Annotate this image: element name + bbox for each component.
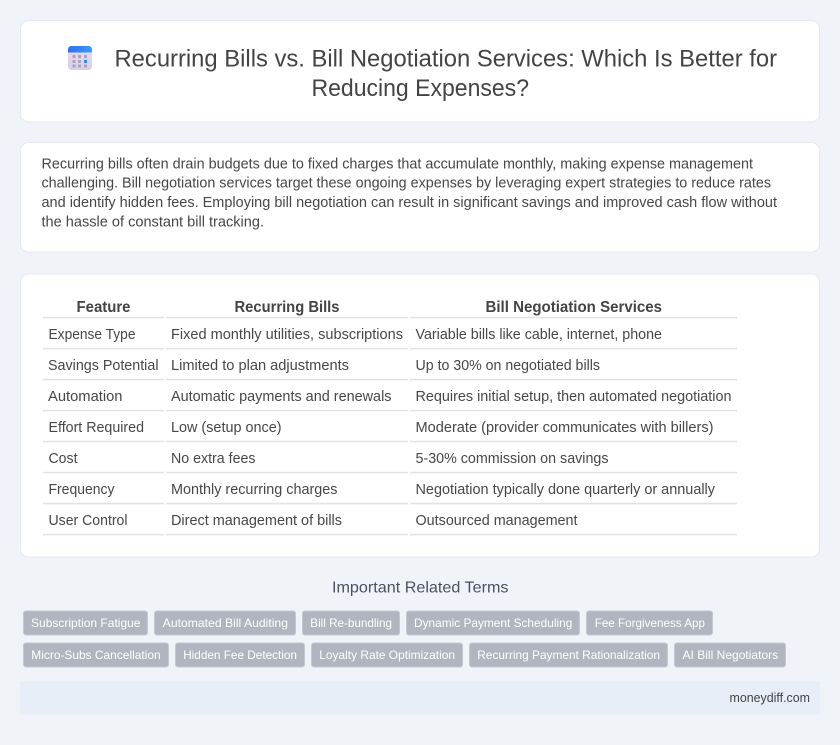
tag: fee forgiveness app (586, 611, 712, 635)
row: automation: Automatic payments and renewals (171, 389, 392, 405)
table header row: Feature (76, 299, 131, 316)
row: frequency: Frequency (48, 482, 115, 498)
related terms heading: Important Related Terms (332, 580, 508, 596)
tag: automated bill auditing: Automated Bill Auditing (163, 616, 288, 630)
tag: recurring payment rationalization: Recurring Payment Rationalization (477, 648, 660, 662)
header panel (20, 20, 820, 122)
icon: calendar (68, 46, 92, 70)
intro text block: Recurring bills often drain budgets due to fixed charges that accumulate monthly, making expense management (42, 156, 753, 172)
tag: hidden fee detection: Hidden Fee Detection (183, 648, 297, 662)
title: Recurring Bills vs. Bill Negotiation Services: Which Is Better for (114, 46, 777, 73)
tag: automated bill auditing (154, 611, 296, 635)
comparison table panel (20, 274, 820, 557)
row: effort required: Low (setup once) (171, 420, 282, 436)
title: Reducing Expenses? (312, 75, 529, 102)
row: savings potential: Limited to plan adjustments (171, 358, 349, 374)
footer bar (20, 681, 820, 714)
row: effort required: Effort Required (48, 420, 144, 436)
tag: bill re-bundling: Bill Re-bundling (310, 616, 392, 630)
tag: dynamic payment scheduling: Dynamic Payment Scheduling (414, 616, 572, 630)
intro text block: challenging. Bill negotiation services target these ongoing expenses by leveraging expert strategies to reduce rates (42, 176, 771, 192)
tag: ai bill negotiators (674, 643, 786, 667)
row: frequency: Negotiation typically done quarterly or annually (416, 482, 716, 498)
footer source text: moneydiff.com (730, 691, 810, 705)
row: expense type: Variable bills like cable, internet, phone (416, 327, 662, 343)
tag: loyalty rate optimization (312, 643, 462, 667)
intro text block (42, 156, 777, 230)
row: cost: 5-30% commission on savings (416, 451, 608, 467)
row: user control: Direct management of bills (171, 513, 342, 529)
row: expense type: Expense Type (48, 327, 136, 343)
row: savings potential: Up to 30% on negotiated bills (416, 358, 600, 374)
row: cost: No extra fees (171, 451, 256, 467)
tag: fee forgiveness app: Fee Forgiveness App (595, 616, 705, 630)
tag: subscription fatigue (24, 611, 148, 635)
table header row (43, 299, 737, 318)
tag: loyalty rate optimization: Loyalty Rate Optimization (319, 648, 455, 662)
tag: micro-subs cancellation: Micro-Subs Cancellation (31, 648, 161, 662)
row: automation (43, 389, 737, 411)
row: savings potential: Savings Potential (48, 358, 158, 374)
tag: bill re-bundling (302, 611, 400, 635)
tag: recurring payment rationalization (470, 643, 668, 667)
tag: micro-subs cancellation (24, 643, 168, 667)
table header row: Recurring Bills (234, 299, 340, 316)
intro text block: and identify hidden fees. Employing bill negotiation can result in significant savings and improved cash flow without (42, 195, 777, 211)
row: frequency (43, 482, 737, 504)
row: frequency: Monthly recurring charges (171, 482, 338, 498)
row: effort required: Moderate (provider communicates with billers) (416, 420, 714, 436)
row: cost: Cost (48, 451, 78, 467)
related terms tags (24, 611, 786, 667)
row: automation: Requires initial setup, then automated negotiation (416, 389, 732, 405)
row: savings potential (43, 358, 737, 380)
row: user control (43, 513, 737, 535)
row: expense type (43, 327, 737, 349)
row: user control: Outsourced management (416, 513, 578, 529)
row: automation: Automation (48, 389, 122, 405)
tag: dynamic payment scheduling (406, 611, 580, 635)
tag: ai bill negotiators: AI Bill Negotiators (682, 648, 778, 662)
row: expense type: Fixed monthly utilities, subscriptions (171, 327, 403, 343)
row: cost (43, 451, 737, 473)
intro panel (20, 142, 820, 252)
table header row: Bill Negotiation Services (486, 299, 662, 316)
row: user control: User Control (48, 513, 128, 529)
title (114, 46, 777, 102)
tag: subscription fatigue: Subscription Fatigue (31, 616, 141, 630)
intro text block: the hassle of constant bill tracking. (42, 214, 264, 230)
row: effort required (43, 420, 737, 442)
tag: hidden fee detection (176, 643, 304, 667)
